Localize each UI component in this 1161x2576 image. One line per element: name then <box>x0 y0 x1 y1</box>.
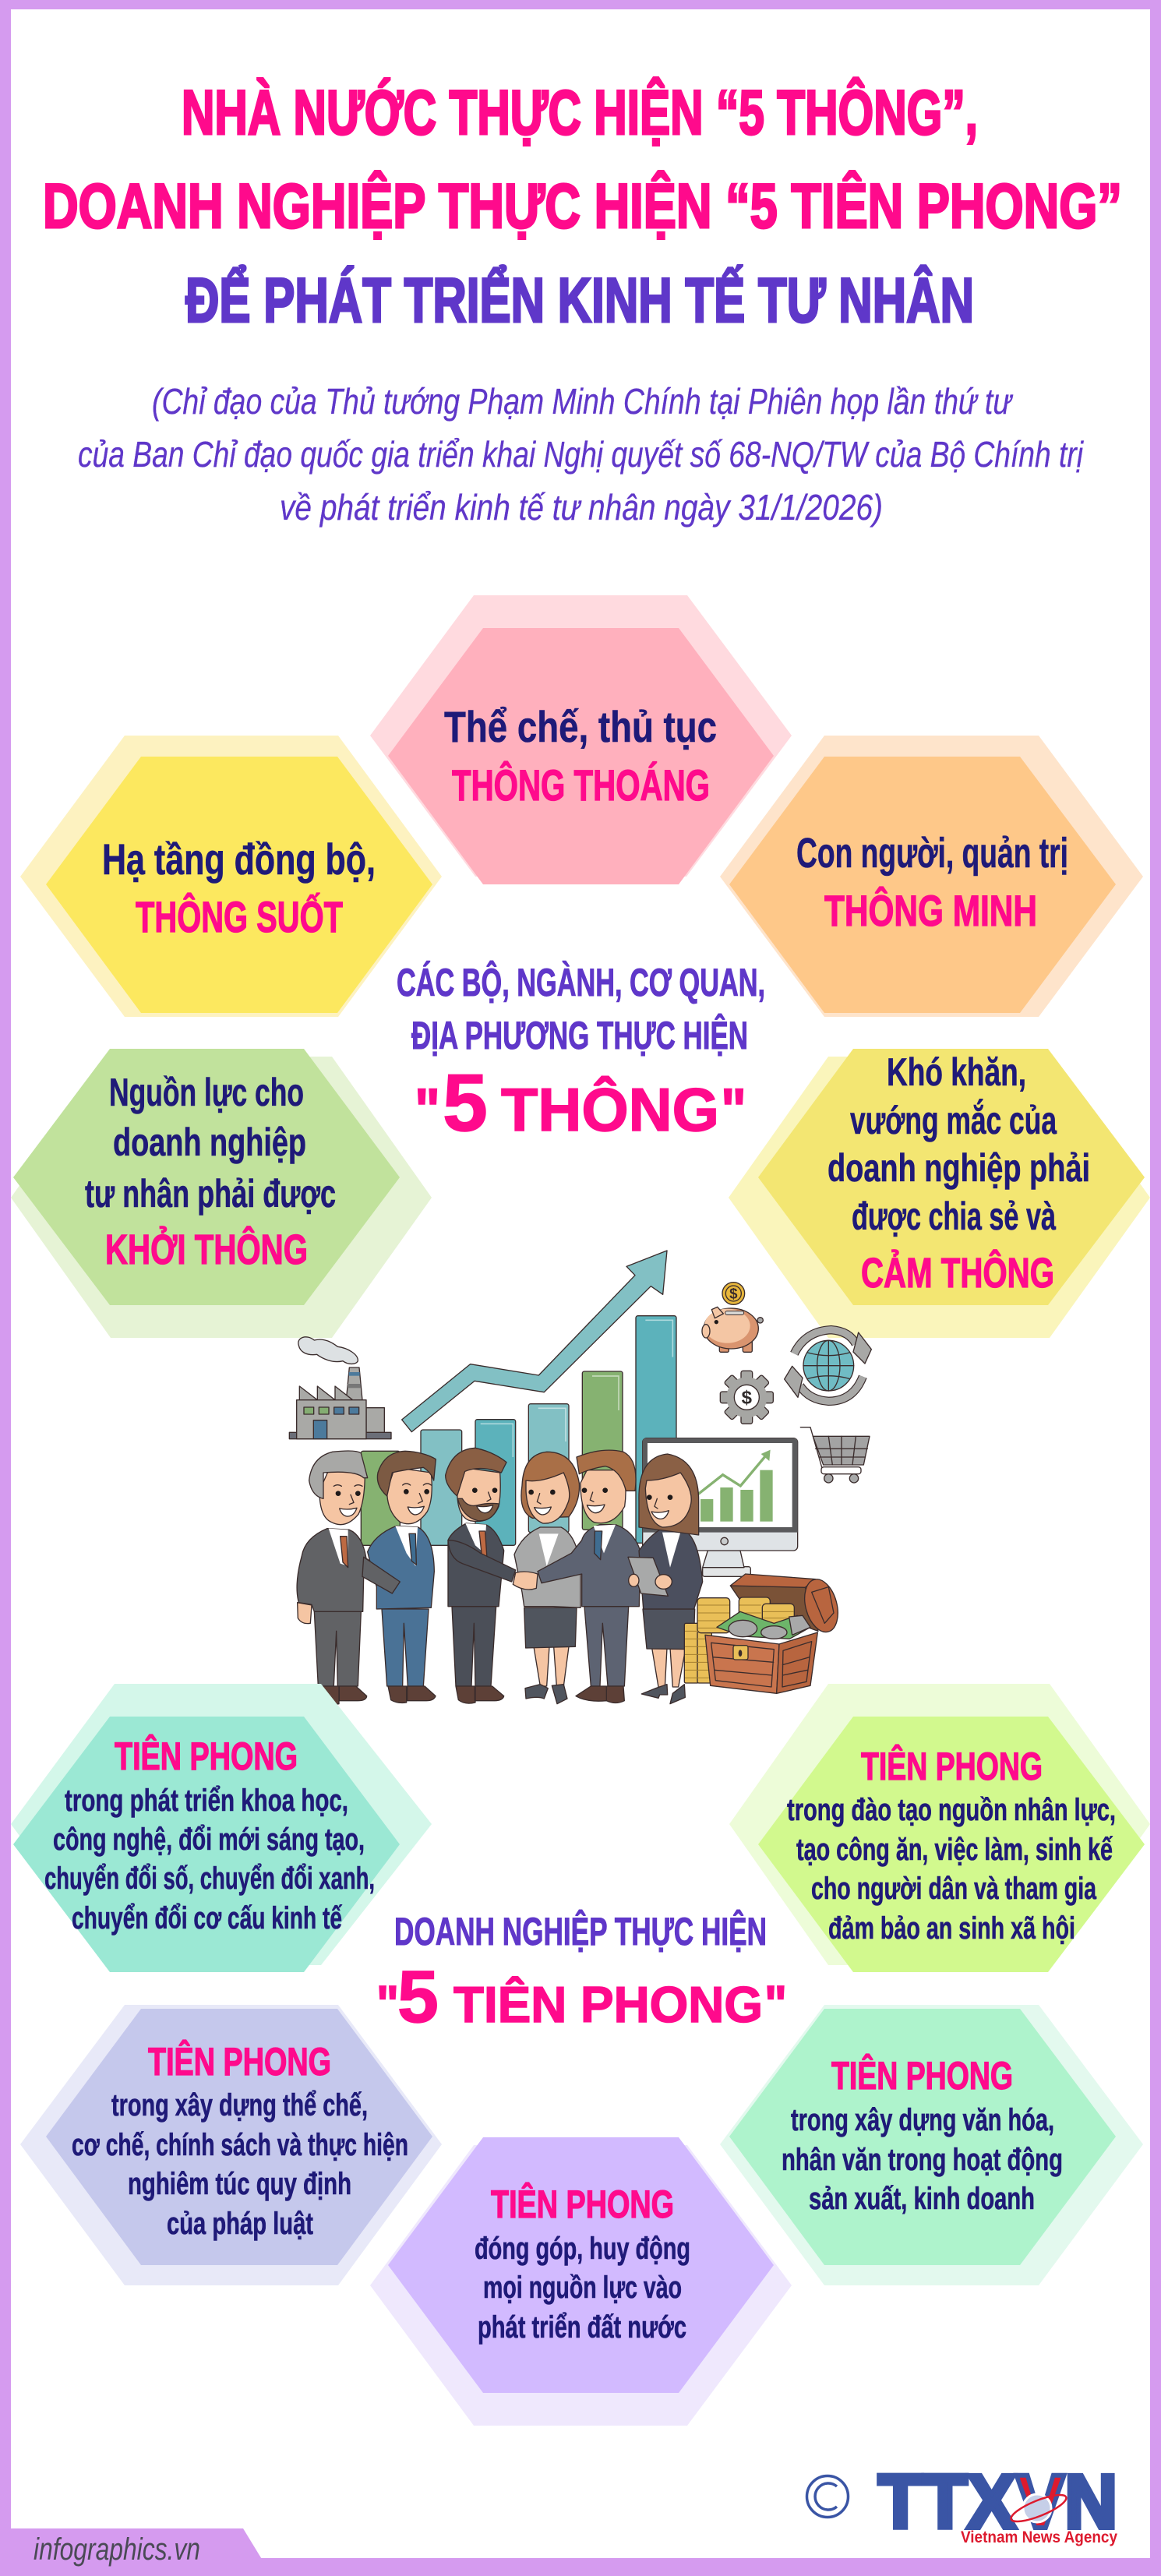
panel: tiên phong khoa học: công nghệ, đổi mới sáng tạo, <box>53 1823 365 1857</box>
icon: gear with dollar: $ <box>742 1388 752 1409</box>
panel: Nguồn lực khởi thông: doanh nghiệp <box>113 1120 306 1164</box>
panel: Nguồn lực khởi thông: KHỞI THÔNG <box>105 1226 308 1273</box>
heading: 5 Tiên Phong: DOANH NGHIỆP THỰC HIỆN <box>394 1910 767 1953</box>
illustration: business people, growth chart and finance icons <box>289 1251 871 1704</box>
person: man shaking hands <box>513 1450 640 1703</box>
panel: tiên phong văn hóa <box>720 2005 1143 2285</box>
panel: Khó khăn cảm thông: Khó khăn, <box>887 1050 1026 1094</box>
panel: tiên phong khoa học: trong phát triển khoa học, <box>65 1784 348 1818</box>
footer tab <box>0 2528 263 2576</box>
panel: Khó khăn cảm thông <box>729 1049 1150 1338</box>
panel: tiên phong xây dựng thể chế: nghiêm túc quy định <box>128 2167 351 2201</box>
arrow: growth trend <box>402 1251 667 1432</box>
person: man in blue suit <box>368 1451 436 1703</box>
heading: 5 Thông: CÁC BỘ, NGÀNH, CƠ QUAN, <box>397 960 765 1004</box>
panel: tiên phong đào tạo nhân lực <box>729 1684 1150 1972</box>
panel: tiên phong xây dựng thể chế: TIÊN PHONG <box>148 2040 331 2084</box>
chart: rising bars <box>361 1316 676 1545</box>
heading: 5 Tiên Phong: TIÊN PHONG <box>453 1976 763 2033</box>
heading: 5 Tiên Phong <box>376 1910 787 2038</box>
icon: piggy bank with coin <box>702 1283 763 1352</box>
panel: tiên phong văn hóa: nhân văn trong hoạt động <box>782 2143 1063 2177</box>
panel: tiên phong đóng góp <box>370 2137 792 2426</box>
heading: 5 Thông: " <box>415 1075 440 1144</box>
logo: TTXVN Vietnam News Agency: TTXVN <box>878 2459 1117 2544</box>
panel: Hạ tầng đồng bộ thông suốt: Hạ tầng đồng bộ, <box>102 835 376 884</box>
panel: tiên phong xây dựng thể chế: của pháp luật <box>167 2207 313 2241</box>
panel: tiên phong văn hóa: sản xuất, kinh doanh <box>809 2182 1035 2216</box>
icon: globe with arrows <box>785 1330 871 1401</box>
icon: coins and treasure chest <box>684 1574 843 1693</box>
icon: gear with dollar <box>720 1371 773 1424</box>
heading: 5 Thông: THÔNG <box>501 1075 719 1144</box>
heading: 5 Thông <box>397 960 765 1149</box>
panel: tiên phong đóng góp: đóng góp, huy động <box>475 2232 690 2266</box>
panel: tiên phong xây dựng thể chế: trong xây dựng thể chế, <box>111 2088 368 2123</box>
panel: tiên phong đóng góp: phát triển đất nước <box>478 2310 686 2345</box>
title <box>43 77 1122 336</box>
icon: piggy bank with coin: $ <box>729 1286 738 1302</box>
heading: 5 Tiên Phong: 5 <box>397 1956 439 2038</box>
person: grey-haired man <box>297 1451 400 1704</box>
panel: tiên phong đóng góp: mọi nguồn lực vào <box>483 2271 682 2305</box>
icon: factory <box>289 1337 391 1439</box>
panel: Khó khăn cảm thông: được chia sẻ và <box>852 1194 1056 1238</box>
heading: 5 Thông: " <box>721 1075 746 1144</box>
copyright symbol <box>807 2476 848 2517</box>
heading: 5 Tiên Phong: " <box>764 1975 787 2034</box>
panel: Thể chế, thủ tục thông thoáng: THÔNG THOÁNG <box>452 760 710 810</box>
panel: Hạ tầng đồng bộ thông suốt: THÔNG SUỐT <box>136 892 343 941</box>
panel: tiên phong đào tạo nhân lực: TIÊN PHONG <box>861 1745 1043 1788</box>
panel: Khó khăn cảm thông: CẢM THÔNG <box>861 1249 1054 1297</box>
subtitle <box>78 381 1084 528</box>
panel: tiên phong khoa học: chuyển đổi số, chuyển đổi xanh, <box>44 1861 375 1896</box>
person: woman with clipboard <box>628 1454 703 1704</box>
panel: Con người, quản trị thông minh <box>720 736 1143 1017</box>
panel: Hạ tầng đồng bộ thông suốt <box>20 736 442 1017</box>
panel: Nguồn lực khởi thông <box>11 1049 432 1338</box>
panel: tiên phong khoa học: TIÊN PHONG <box>115 1734 298 1778</box>
subtitle: về phát triển kinh tế tư nhân ngày 31/1/2026) <box>280 487 883 528</box>
heading: 5 Thông: 5 <box>443 1058 488 1149</box>
panel: Con người, quản trị thông minh: THÔNG MINH <box>824 886 1037 935</box>
icon: shopping cart <box>800 1427 870 1483</box>
panel: tiên phong xây dựng thể chế: cơ chế, chính sách và thực hiện <box>72 2128 408 2162</box>
heading: 5 Tiên Phong: " <box>376 1975 399 2034</box>
heading: 5 Thông: ĐỊA PHƯƠNG THỰC HIỆN <box>411 1014 748 1057</box>
logo: TTXVN Vietnam News Agency: Vietnam News Agency <box>961 2528 1117 2546</box>
footer source: infographics.vn <box>34 2532 200 2567</box>
panel: tiên phong văn hóa: trong xây dựng văn hóa, <box>791 2103 1054 2137</box>
panel: Nguồn lực khởi thông: Nguồn lực cho <box>109 1071 304 1114</box>
panel: tiên phong xây dựng thể chế <box>20 2005 442 2285</box>
panel: Thể chế, thủ tục thông thoáng: Thể chế, thủ tục <box>444 702 717 751</box>
person: bearded man <box>446 1448 516 1703</box>
person: woman in grey jacket <box>514 1452 580 1704</box>
panel: tiên phong khoa học <box>11 1684 432 1972</box>
panel: tiên phong khoa học: chuyển đổi cơ cấu kinh tế <box>72 1901 343 1936</box>
panel: Thể chế, thủ tục thông thoáng <box>370 595 792 884</box>
panel: Khó khăn cảm thông: vướng mắc của <box>850 1099 1057 1142</box>
panel: Nguồn lực khởi thông: tư nhân phải được <box>85 1172 336 1216</box>
arm: grey-haired man on colleague <box>362 1557 400 1593</box>
icon: monitor with chart <box>643 1438 798 1576</box>
panel: tiên phong đóng góp: TIÊN PHONG <box>491 2183 674 2226</box>
panel: tiên phong văn hóa: TIÊN PHONG <box>831 2054 1013 2098</box>
